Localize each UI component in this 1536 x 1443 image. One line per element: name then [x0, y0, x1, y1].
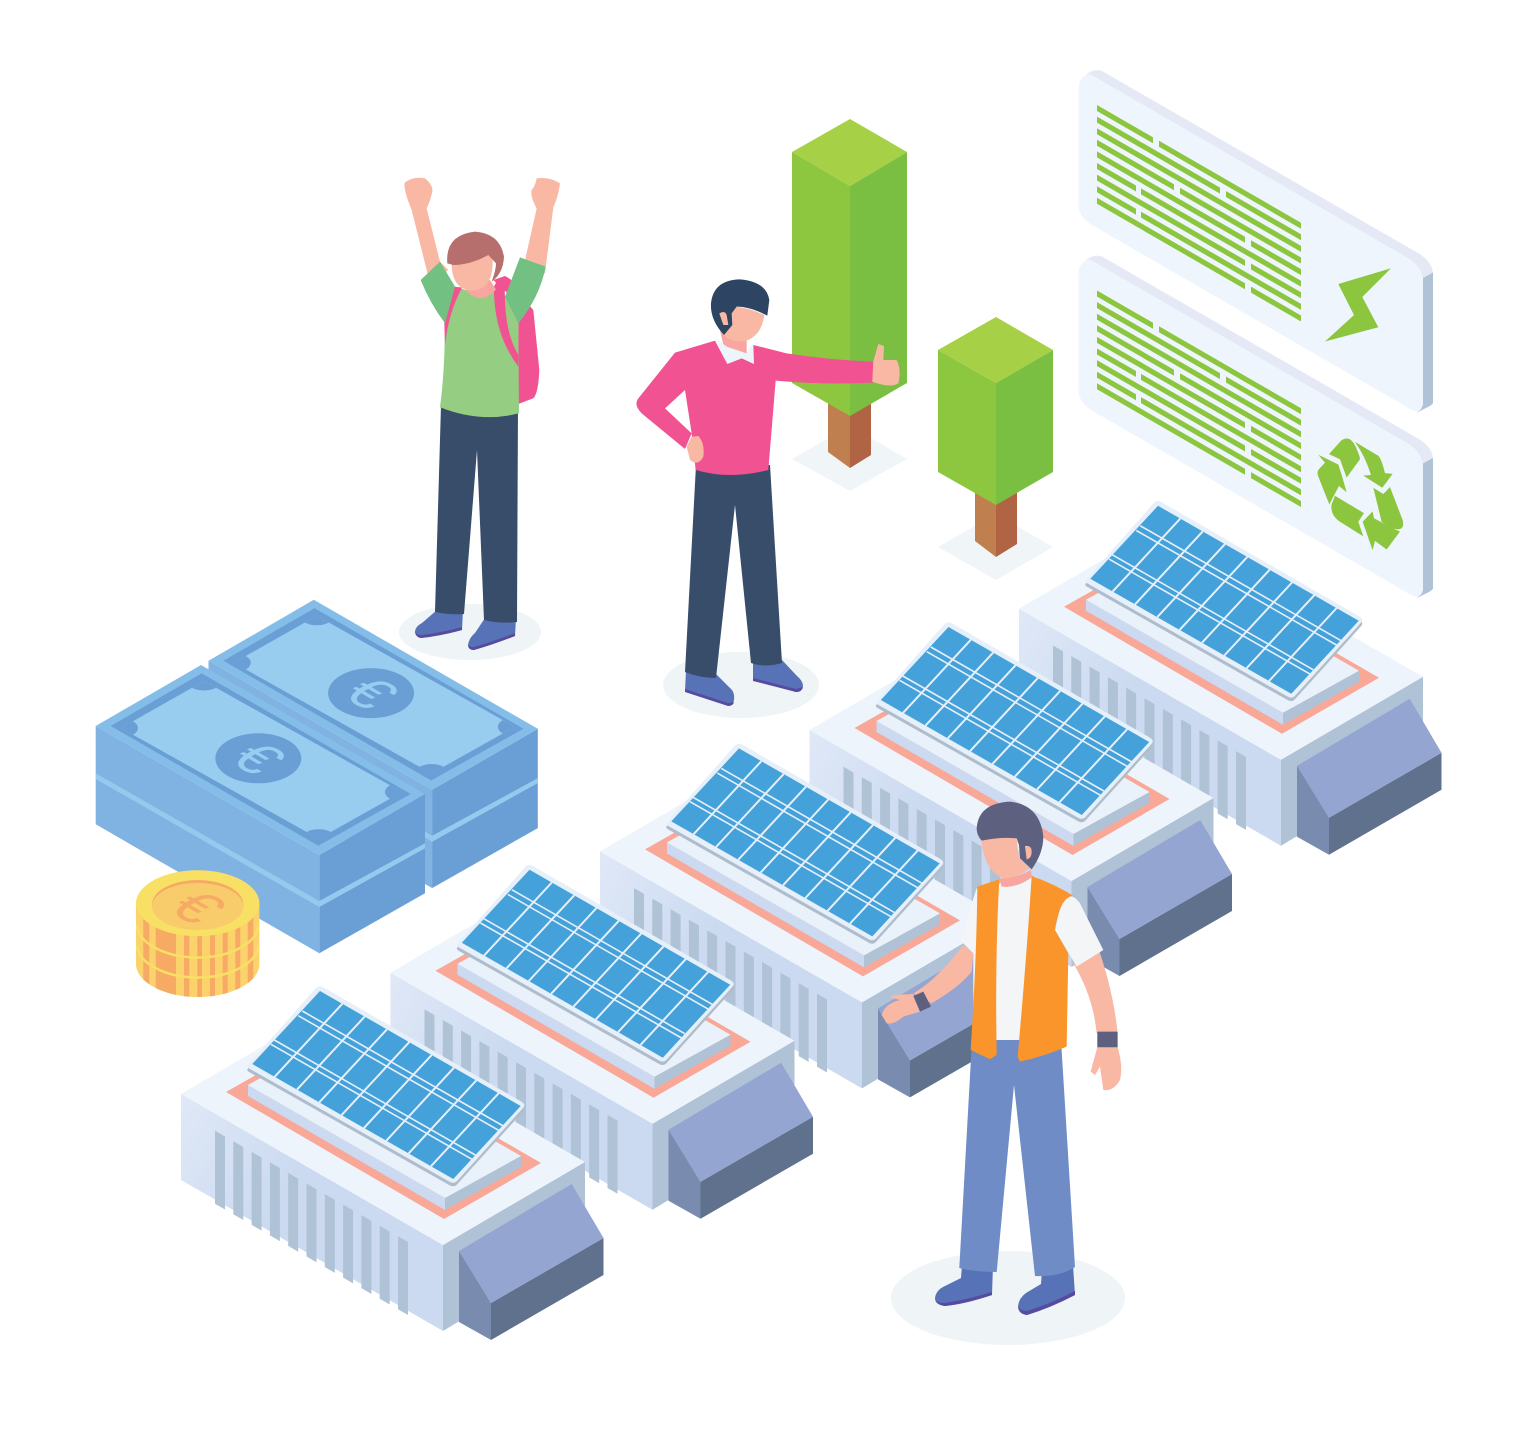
- trousers: [435, 405, 518, 623]
- upper body: [882, 802, 1121, 1090]
- text lines: [1097, 290, 1301, 507]
- tree: large: [792, 119, 907, 491]
- upper body: [636, 279, 900, 475]
- tree shadow: [938, 514, 1053, 580]
- solar panel: [1085, 501, 1362, 701]
- text lines: [1097, 105, 1301, 322]
- panel: recycling card: [1078, 256, 1433, 598]
- upper body: [404, 178, 560, 417]
- tree trunk: [975, 490, 1017, 557]
- building 2 with solar panel: [390, 865, 813, 1219]
- building 1 with solar panel: [181, 986, 604, 1340]
- person: worker in orange vest: [882, 802, 1125, 1345]
- trousers: [959, 1040, 1075, 1276]
- building 3 with solar panel: [600, 744, 1022, 1097]
- shoes: [685, 660, 803, 706]
- shoes: [415, 610, 516, 650]
- solar panel: [457, 865, 734, 1065]
- tree shadow: [792, 426, 907, 491]
- solar panel: [247, 986, 524, 1186]
- ground shadow: [891, 1251, 1125, 1345]
- solar panel: [666, 744, 943, 944]
- building 5 with solar panel: [1019, 501, 1442, 855]
- tree: small: [938, 317, 1053, 580]
- euro symbol: €: [216, 735, 299, 783]
- person: girl cheering with backpack: [399, 178, 560, 660]
- tree trunk: [828, 400, 871, 468]
- tree canopy: [792, 119, 907, 416]
- coins: stack of euro coins: [136, 870, 259, 1000]
- tree canopy: [938, 317, 1053, 505]
- panel: energy card: [1078, 70, 1433, 413]
- solar panel: [876, 622, 1153, 822]
- back banknote stack: [208, 600, 538, 888]
- front banknote stack: [96, 665, 425, 953]
- trousers: [685, 465, 782, 678]
- euro symbol: €: [329, 670, 412, 718]
- euro symbol: €: [154, 882, 241, 932]
- icon: recycling arrows: [1317, 438, 1403, 550]
- ground shadow: [399, 604, 541, 660]
- money: banknote stacks: [96, 600, 538, 953]
- icon: lightning bolt: [1325, 268, 1391, 342]
- building 4 with solar panel: [810, 622, 1232, 976]
- shoes: [935, 1265, 1075, 1315]
- ground shadow: [663, 652, 819, 718]
- person: man with thumbs up: [636, 279, 900, 718]
